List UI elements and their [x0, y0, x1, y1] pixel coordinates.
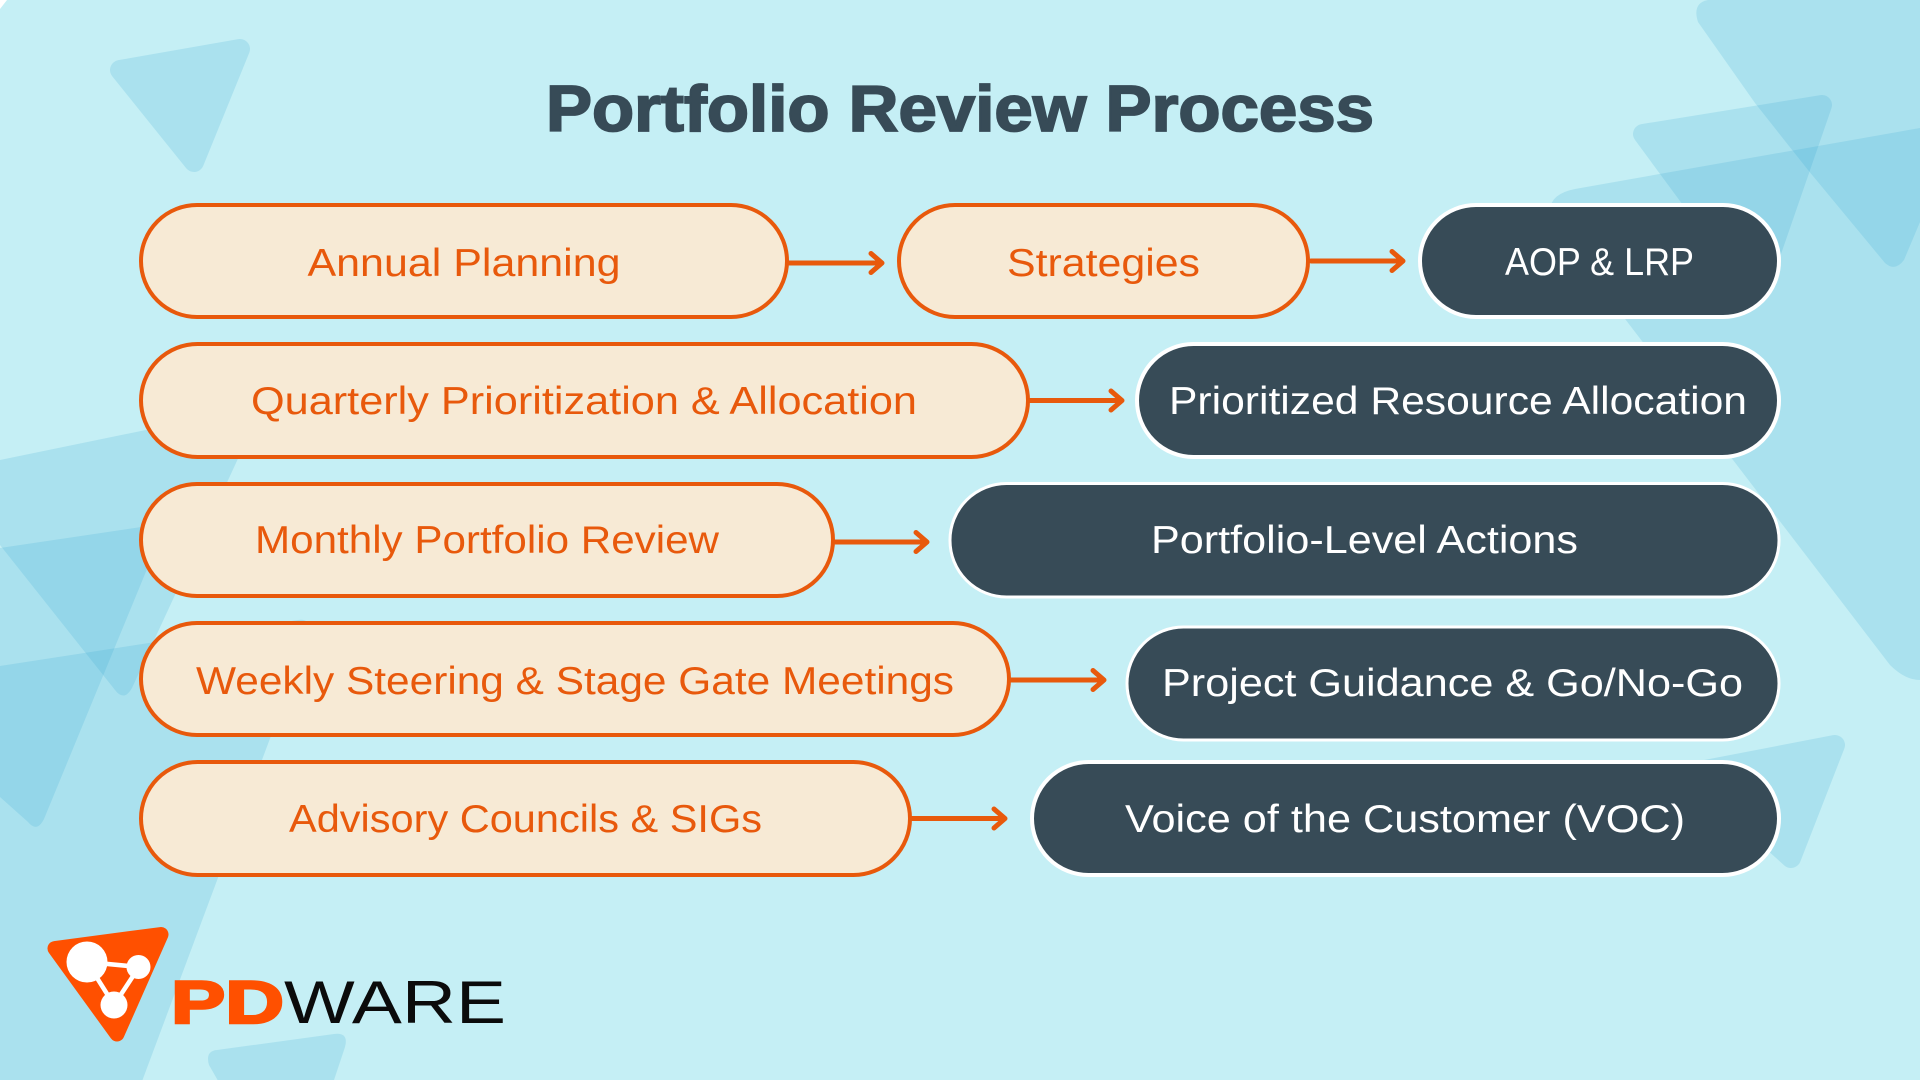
arrow: Monthly to Portfolio-Level Actions [835, 532, 927, 552]
pill: Portfolio-Level Actions [950, 484, 1779, 597]
pill: Strategies [899, 205, 1308, 317]
pill: AOP and LRP [1420, 205, 1779, 317]
pill: Advisory Councils and SIGs [141, 762, 910, 875]
row 4: weekly steering to project guidance [141, 623, 1779, 740]
arrow: Advisory to Voice of the Customer [912, 809, 1005, 828]
row 5: advisory councils to voice of the customer [141, 762, 1779, 875]
pill: Quarterly Prioritization and Allocation: Quarterly Prioritization & Allocation [251, 380, 917, 423]
arrow: Quarterly to Prioritized Resource Allocation [1030, 391, 1122, 410]
arrow: Strategies to AOP and LRP [1311, 252, 1403, 270]
icon: logo triangle with network nodes [55, 934, 161, 1034]
pill: Voice of the Customer (VOC) [1032, 762, 1779, 875]
pill: AOP and LRP: AOP & LRP [1505, 241, 1694, 284]
pill: Monthly Portfolio Review [141, 484, 833, 596]
pill: Project Guidance and Go/No-Go [1127, 627, 1779, 740]
row 3: monthly review to portfolio actions [141, 484, 1779, 597]
pill: Annual Planning [141, 205, 787, 317]
pill: Strategies: Strategies [1007, 242, 1200, 285]
arrow: Weekly to Project Guidance [1011, 670, 1104, 690]
row 2: quarterly prioritization to resource allocation [141, 344, 1779, 457]
pill: Annual Planning: Annual Planning [308, 242, 620, 285]
pill: Project Guidance and Go/No-Go: Project Guidance & Go/No-Go [1162, 662, 1743, 705]
wordmark: PD: PD [171, 969, 284, 1036]
pill: Prioritized Resource Allocation: Prioritized Resource Allocation [1169, 380, 1747, 423]
pill: Monthly Portfolio Review: Monthly Portfolio Review [255, 519, 720, 562]
title: Portfolio Review Process [546, 72, 1374, 145]
pill: Weekly Steering and Stage Gate Meetings [141, 623, 1009, 735]
pill: Prioritized Resource Allocation [1137, 344, 1779, 457]
pill: Portfolio-Level Actions: Portfolio-Level Actions [1151, 519, 1578, 562]
pill: Weekly Steering and Stage Gate Meetings: Weekly Steering & Stage Gate Meetings [196, 660, 954, 703]
pill: Voice of the Customer (VOC): Voice of the Customer (VOC) [1125, 798, 1685, 841]
pill: Advisory Councils and SIGs: Advisory Councils & SIGs [289, 798, 762, 841]
wordmark: WARE: WARE [284, 969, 506, 1036]
logo: PDWARE [55, 934, 506, 1036]
row 1: annual planning to AOP and LRP [141, 205, 1779, 317]
pill: Quarterly Prioritization and Allocation [141, 344, 1028, 457]
arrow: Annual Planning to Strategies [789, 254, 882, 272]
